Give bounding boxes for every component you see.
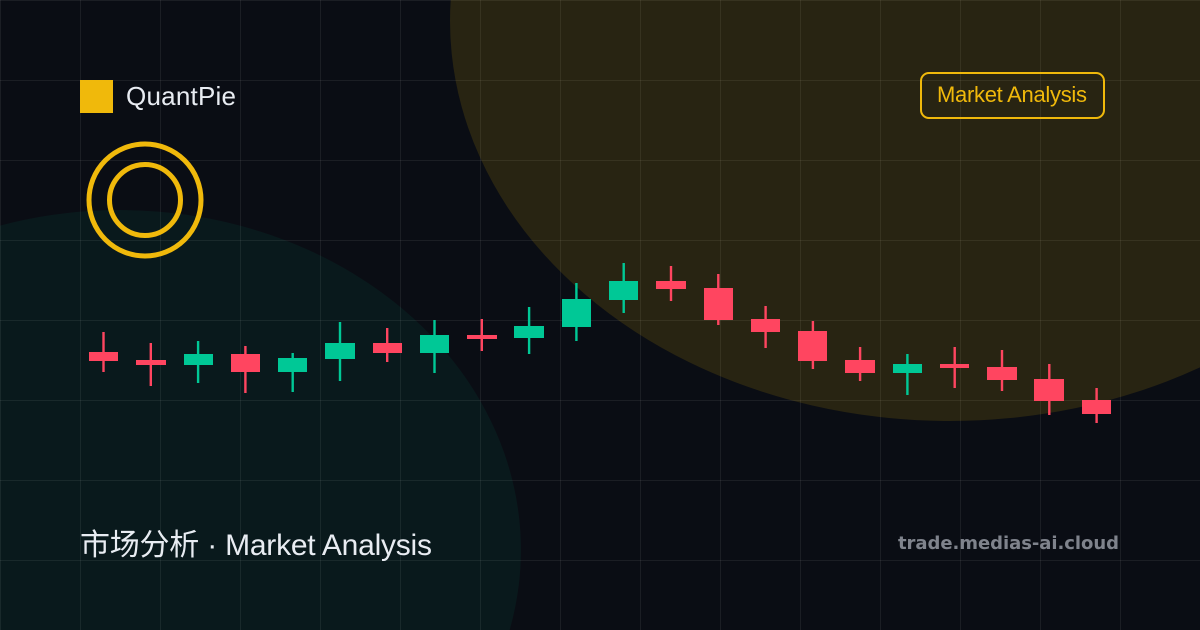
candlestick chart: [89, 263, 1111, 423]
footer URL: trade.medias-ai.cloud: [898, 533, 1119, 554]
icon: concentric gold rings: [89, 144, 201, 256]
logo wordmark: QuantPie: [126, 81, 236, 111]
gold background ellipse: [450, 0, 1200, 421]
badge: Market Analysis: [921, 73, 1104, 118]
logo: QuantPie: [80, 80, 236, 113]
footer title: 市场分析 · Market Analysis: [80, 529, 432, 562]
teal background ellipse: [0, 210, 521, 630]
logo square: [80, 80, 113, 113]
badge: Market Analysis: Market Analysis: [937, 82, 1087, 107]
